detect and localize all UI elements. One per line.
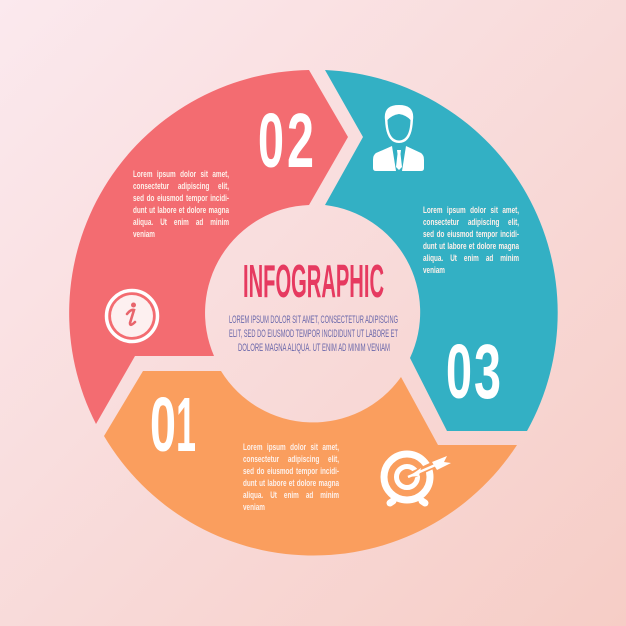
text block 02: sed do eiusmod tempor incidi- bbox=[133, 193, 229, 203]
text: INFOGRAPHIC bbox=[243, 255, 384, 307]
text block 02: dunt ut labore et dolore magna bbox=[133, 205, 229, 215]
panel: 03 teal segment bbox=[325, 70, 558, 431]
teal arrow shape bbox=[325, 70, 558, 431]
text block 02: Lorem ipsum dolor sit amet, bbox=[133, 169, 229, 179]
panel: 02 red segment bbox=[69, 70, 348, 424]
red arrow shape bbox=[69, 70, 348, 424]
text block 02: veniam bbox=[133, 229, 155, 239]
text block 01: aliqua. Ut enim ad minim bbox=[243, 490, 339, 500]
number 02: 0 bbox=[258, 98, 284, 184]
icon: info bbox=[106, 290, 158, 342]
text block 03: veniam bbox=[423, 265, 445, 275]
orange arrow shape bbox=[104, 371, 517, 556]
text block 01: consectetur adipiscing elit, bbox=[243, 454, 339, 464]
number 02: 2 bbox=[287, 98, 314, 184]
text block 03: Lorem ipsum dolor sit amet, bbox=[423, 205, 519, 215]
text block 01 bbox=[243, 441, 339, 513]
text block 02: aliqua. Ut enim ad minim bbox=[133, 217, 229, 227]
text block 03: consectetur adipiscing elit, bbox=[423, 217, 519, 227]
icon: target with arrow bbox=[384, 454, 451, 503]
text block 02 bbox=[133, 168, 229, 240]
center circle bbox=[229, 255, 398, 354]
text block 03: aliqua. Ut enim ad minim bbox=[423, 253, 519, 263]
center text: LOREM IPSUM DOLOR SIT AMET, CONSECTETUR ADIPISCING bbox=[229, 314, 398, 326]
text block 03: dunt ut labore et dolore magna bbox=[423, 241, 519, 251]
number 03: 3 bbox=[474, 329, 501, 415]
icon: businessman bbox=[373, 105, 424, 171]
center text bbox=[229, 314, 398, 354]
text block 01: Lorem ipsum dolor sit amet, bbox=[243, 442, 339, 452]
text block 01: sed do eiusmod tempor incidi- bbox=[243, 466, 339, 476]
text block 03: sed do eiusmod tempor incidi- bbox=[423, 229, 519, 239]
number 01: 0 bbox=[150, 382, 176, 468]
text block 03 bbox=[423, 204, 519, 276]
panel: 01 orange segment: 1 bbox=[176, 382, 196, 468]
panel: 01 orange segment bbox=[104, 371, 517, 556]
center text: DOLORE MAGNA ALIQUA. UT ENIM AD MINIM VENIAM bbox=[238, 342, 390, 354]
number 03: 0 bbox=[446, 329, 472, 415]
text block 01: dunt ut labore et dolore magna bbox=[243, 478, 339, 488]
center text: ELIT, SED DO EIUSMOD TEMPOR INCIDIDUNT UT LABORE ET bbox=[229, 328, 398, 340]
text block 01: veniam bbox=[243, 502, 265, 512]
text block 02: consectetur adipiscing elit, bbox=[133, 181, 229, 191]
